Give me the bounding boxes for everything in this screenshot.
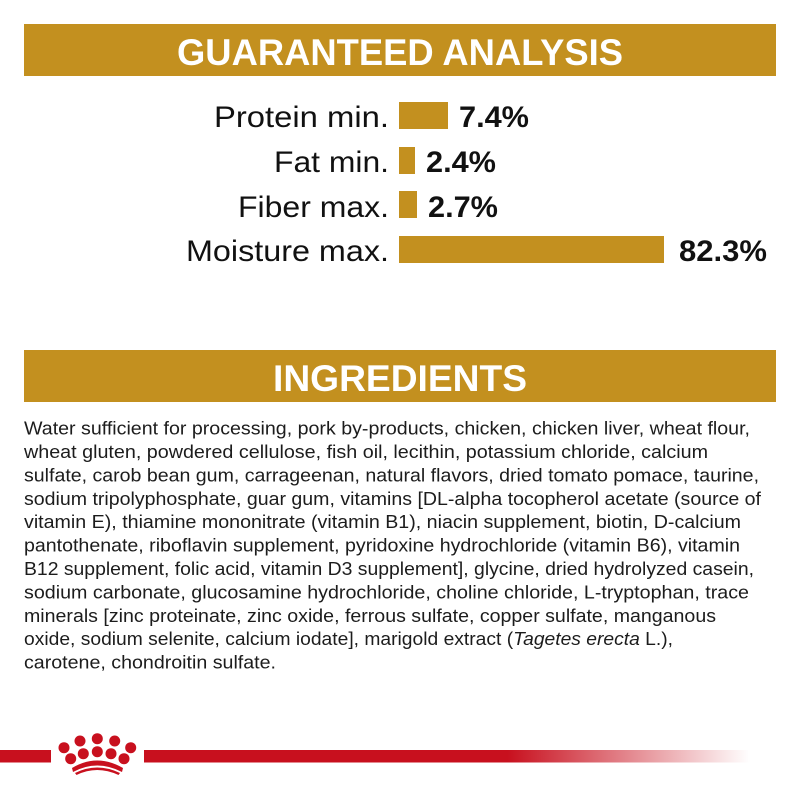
row: protein: 7.4% (459, 101, 529, 134)
icon: royal canin crown logo (58, 733, 136, 775)
text block: ingredients list: Water sufficient for processing, pork by-products, chicken, chicken liver, wheat flour, (24, 418, 750, 438)
heading: ingredients: INGREDIENTS (273, 358, 527, 399)
row: fat: Fat min. (274, 146, 389, 179)
row: moisture (186, 235, 767, 268)
text block: ingredients list: carotene, chondroitin sulfate. (24, 652, 276, 672)
row: fat (274, 146, 496, 179)
row: moisture: 82.3% (679, 235, 767, 268)
text block: ingredients list: minerals [zinc proteinate, zinc oxide, ferrous sulfate, copper sulfate, manganous (24, 606, 716, 626)
heading: guaranteed analysis: GUARANTEED ANALYSIS (177, 32, 623, 73)
footer band left (0, 750, 51, 762)
row: moisture: Moisture max. (186, 235, 389, 268)
text block: ingredients list: oxide, sodium selenite, calcium iodate], marigold extract ( Tagetes erecta L.), (24, 629, 673, 649)
bar chart: guaranteed analysis (186, 101, 767, 268)
text block: ingredients list: sodium carbonate, glucosamine hydrochloride, choline chloride, L-tryptophan, trace (24, 582, 749, 602)
heading: ingredients (24, 350, 776, 402)
row: fat: 2.4% (426, 146, 496, 179)
heading: guaranteed analysis (24, 24, 776, 76)
text block: ingredients list: B12 supplement, folic acid, vitamin D3 supplement], glycine, dried hydrolyzed casein, (24, 559, 754, 579)
text block: ingredients list (23, 418, 762, 672)
footer band right, fading (144, 750, 750, 762)
row: fiber: Fiber max. (238, 191, 389, 224)
row: fiber (238, 191, 498, 224)
row: protein: Protein min. (214, 101, 389, 134)
text block: ingredients list: sulfate, carob bean gum, carrageenan, natural flavors, dried tomato pomace, taurine, (24, 466, 759, 486)
text block: ingredients list: wheat gluten, powdered cellulose, fish oil, lecithin, potassium chloride, calcium (23, 442, 708, 462)
text block: ingredients list: vitamin E), thiamine mononitrate (vitamin B1), niacin supplement, biotin, D-calcium (24, 512, 741, 532)
text block: ingredients list: sodium tripolyphosphate, guar gum, vitamins [DL-alpha tocopherol acetate (source of (24, 489, 762, 509)
text block: ingredients list: pantothenate, riboflavin supplement, pyridoxine hydrochloride (vitamin B6), vitamin (24, 536, 740, 556)
row: protein (214, 101, 529, 134)
row: fiber: 2.7% (428, 191, 498, 224)
